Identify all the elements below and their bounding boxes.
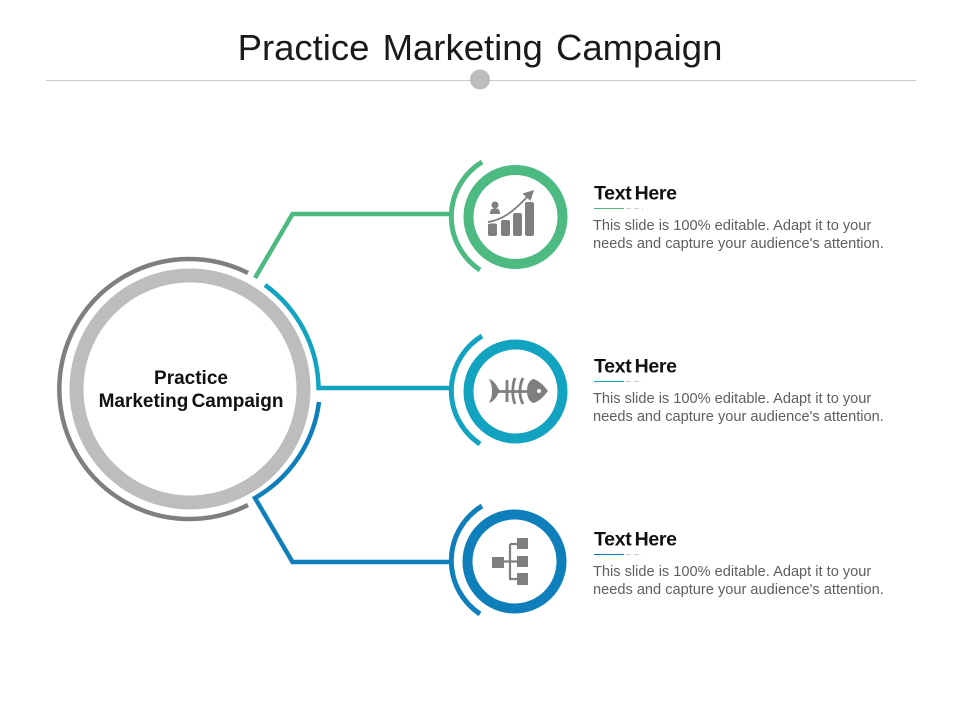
connector: teal (265, 285, 452, 388)
text block 3: This slide is 100% editable. Adapt it to your (593, 564, 871, 580)
text block 3 (593, 528, 884, 598)
text block 3: Text Here (594, 528, 677, 550)
text block 1: This slide is 100% editable. Adapt it to your (593, 218, 871, 234)
title marker dot (470, 70, 490, 90)
central circle (59, 259, 303, 519)
node: green ring (451, 162, 562, 270)
node: blue ring (451, 506, 562, 614)
icon: hierarchy (492, 538, 528, 585)
text block 2 (593, 356, 884, 425)
icon: growth chart (488, 190, 534, 236)
text block 2: Text Here (594, 356, 677, 378)
connector: blue (255, 402, 452, 562)
node: teal ring (451, 336, 562, 444)
text block 2: This slide is 100% editable. Adapt it to your (593, 391, 871, 407)
central circle: Marketing Campaign (99, 391, 283, 412)
icon: fish bone (489, 378, 548, 404)
text block 3: needs and capture your audience's attention. (593, 582, 884, 598)
title: Practice Marketing Campaign (238, 27, 722, 68)
connector: green (255, 214, 452, 278)
text block 2: needs and capture your audience's attention. (593, 409, 884, 425)
text block 1: Text Here (594, 182, 677, 204)
text block 1: needs and capture your audience's attention. (593, 236, 884, 252)
text block 1 (593, 182, 884, 252)
central circle: Practice (154, 368, 228, 389)
